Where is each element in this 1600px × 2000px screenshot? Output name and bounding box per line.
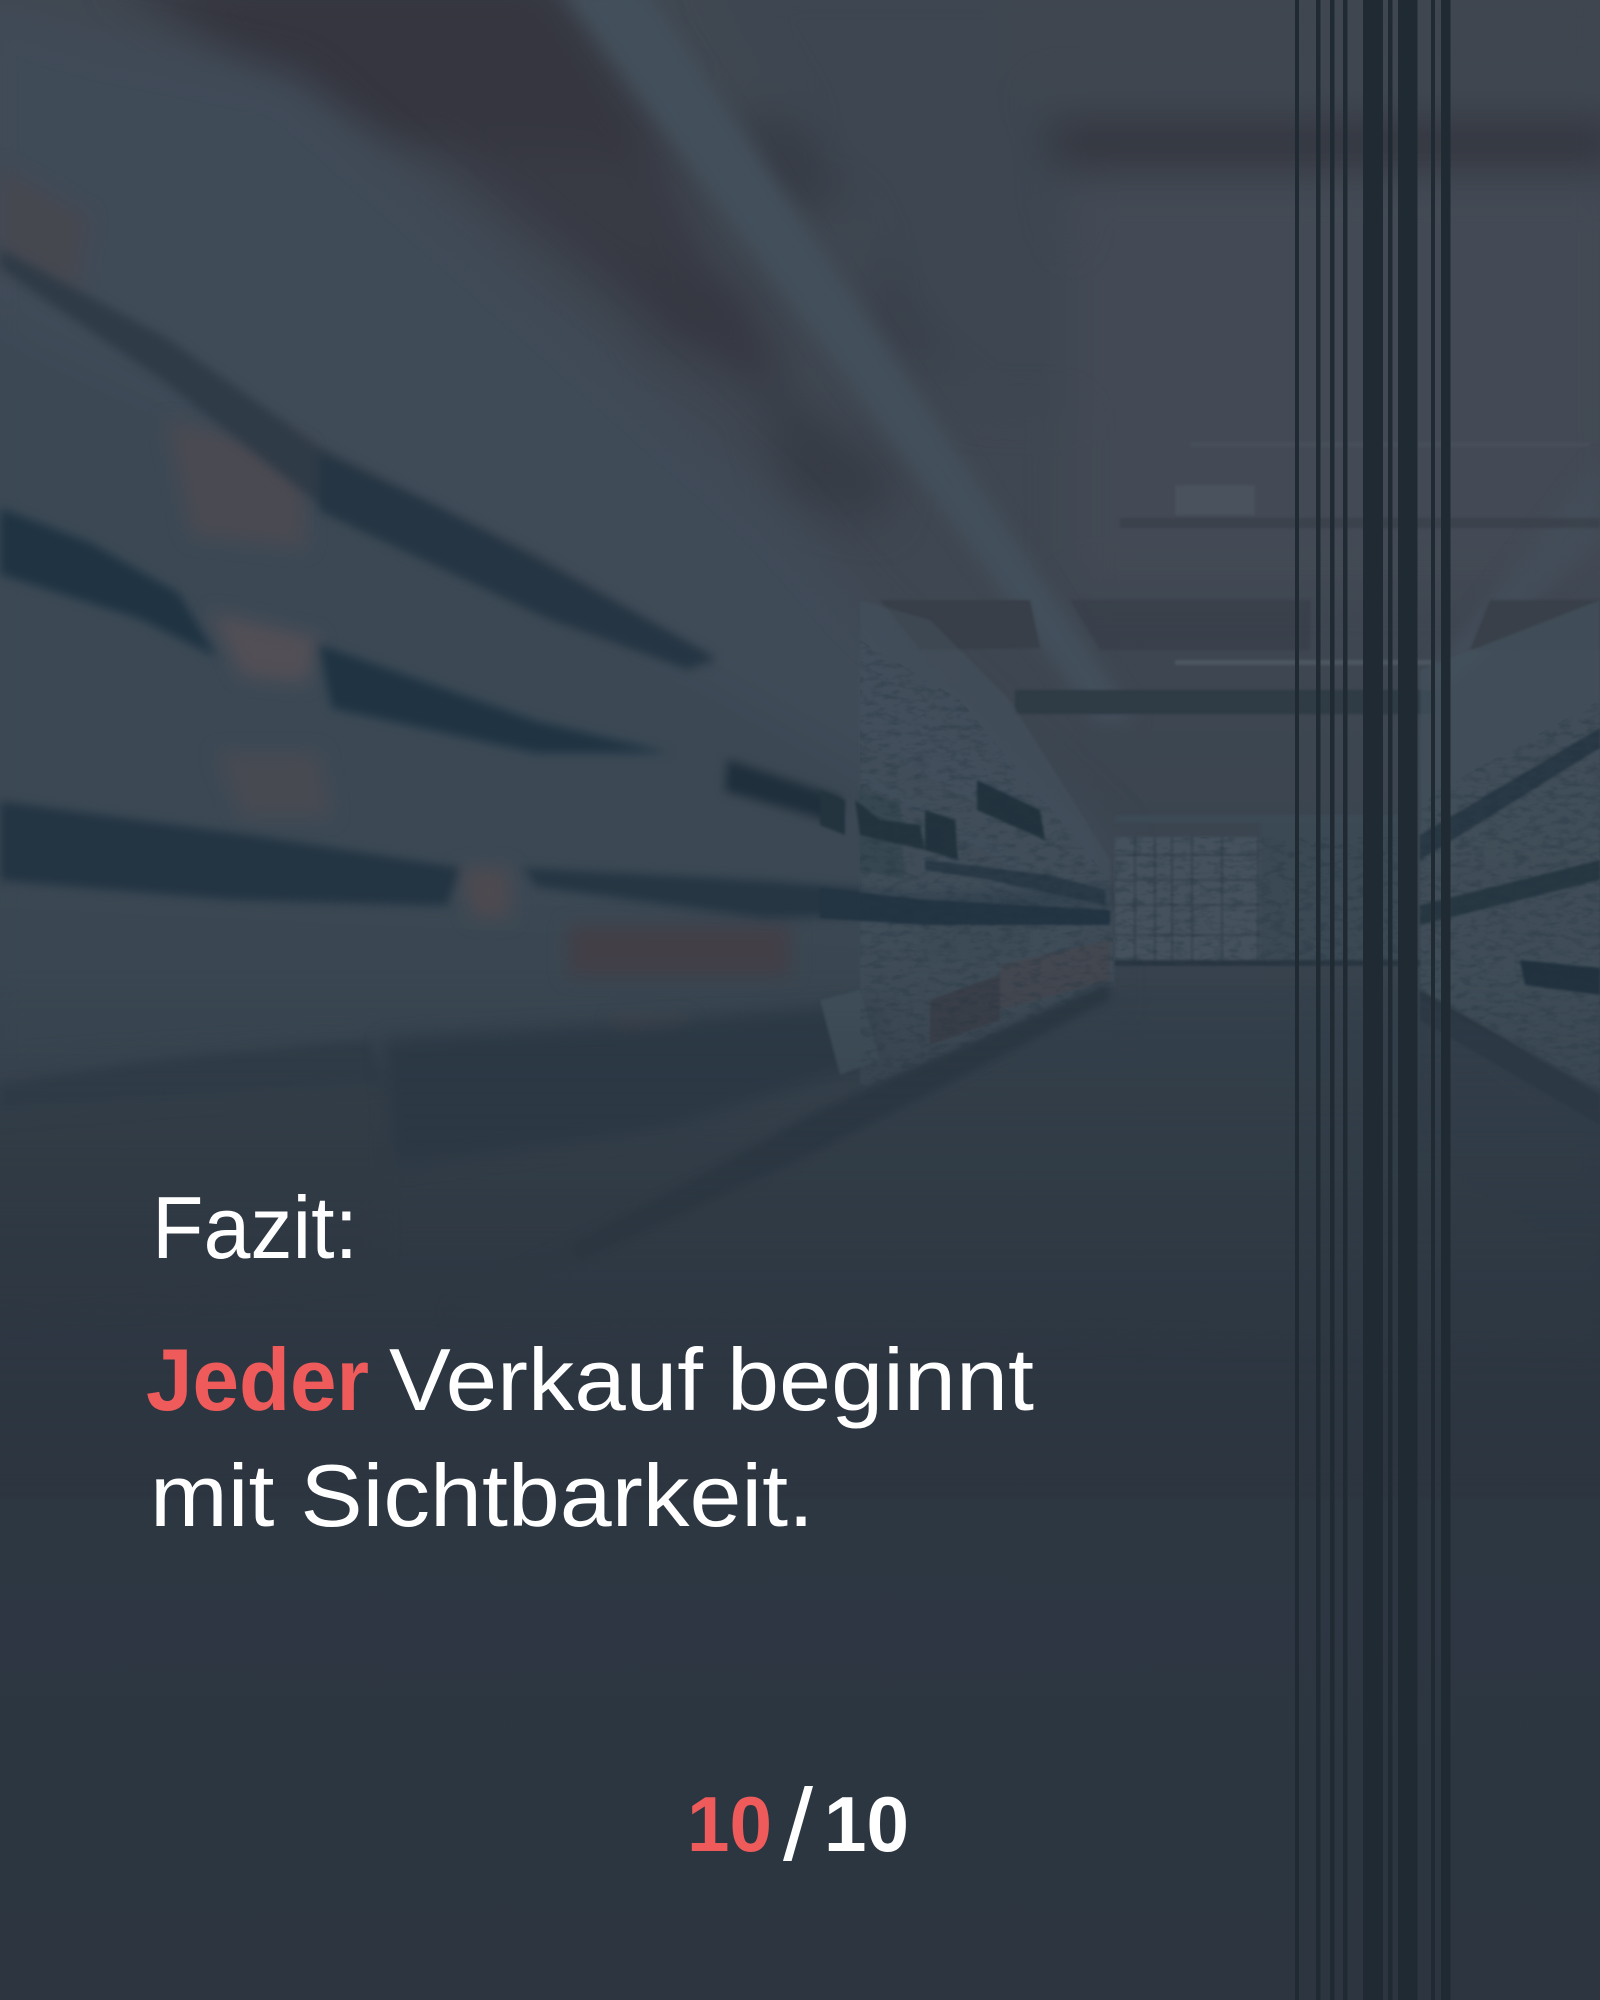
- headline: Jeder Verkauf beginnt mit Sichtbarkeit: Jeder: [146, 1330, 369, 1429]
- red tinted products: [0, 166, 791, 1327]
- headline: Jeder Verkauf beginnt mit Sichtbarkeit: beginnt: [727, 1330, 1034, 1429]
- ceiling trusses at aisle end: [880, 442, 1600, 714]
- page counter 10/10: 10: [824, 1780, 909, 1868]
- left aisle shelves: [820, 600, 1115, 1090]
- floor: [447, 989, 1600, 1352]
- page counter 10/10: /: [783, 1768, 814, 1882]
- product texture: [860, 651, 1600, 1046]
- heading: Fazit: Fazit:: [152, 1178, 358, 1277]
- aisle floor edge: [570, 982, 1110, 1262]
- right aisle shelves: [1420, 600, 1600, 1270]
- ceiling light beam: [561, 0, 1600, 721]
- page counter 10/10: [687, 1768, 909, 1882]
- vertical barcode stripes: [1295, 0, 1450, 2000]
- lower fade to dark panel: [0, 970, 1600, 1500]
- page counter 10/10: 10: [687, 1780, 772, 1868]
- headline: Jeder Verkauf beginnt mit Sichtbarkeit: [146, 1330, 1034, 1545]
- headline: Jeder Verkauf beginnt mit Sichtbarkeit: Verkauf: [389, 1330, 704, 1429]
- ceiling shadows: [115, 0, 1600, 587]
- shelf shadow gaps: [0, 249, 1110, 1110]
- back wall of aisle: [1115, 815, 1435, 966]
- lower shelf shadow: [383, 1002, 880, 1167]
- headline: Jeder Verkauf beginnt mit Sichtbarkeit: mit Sichtbarkeit.: [150, 1446, 814, 1545]
- left shelf faces: [0, 0, 1110, 1085]
- background: supermarket aisle photo: [0, 0, 1600, 1146]
